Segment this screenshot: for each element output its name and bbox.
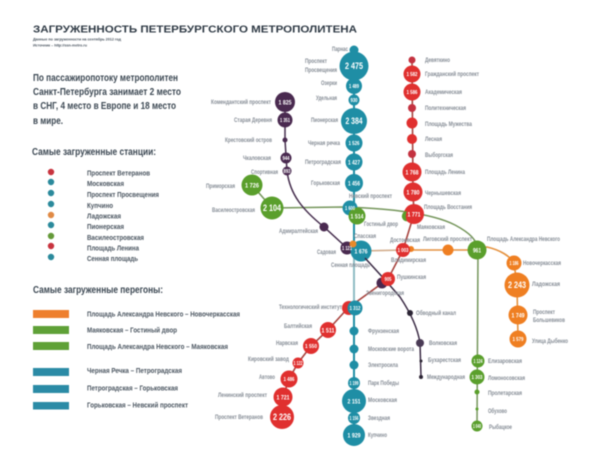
passenger numbers: 2 384 bbox=[346, 116, 362, 126]
station labels: Кировский завод bbox=[248, 355, 289, 363]
station labels: Обухово bbox=[488, 407, 507, 415]
station labels: Гостиный двор bbox=[364, 220, 398, 228]
passenger numbers: 1 156 bbox=[350, 416, 359, 422]
station labels: Политехническая bbox=[425, 105, 466, 112]
station labels: Пушкинская bbox=[397, 274, 426, 281]
legend: busiest stations: Проспект Просвещения bbox=[87, 190, 159, 199]
station labels: Автово bbox=[259, 374, 275, 381]
passenger numbers: 1 726 bbox=[245, 182, 259, 190]
station labels: Звенигородская bbox=[366, 290, 404, 297]
station labels: Комендантский проспект bbox=[211, 98, 271, 106]
passenger numbers: 1 579 bbox=[512, 337, 524, 343]
station labels: Чернышевская bbox=[425, 190, 461, 197]
heading: busiest stations: Самые загруженные станции: bbox=[32, 147, 156, 158]
passenger numbers: 1 514 bbox=[350, 214, 364, 220]
line: red (Kirovsko-Vyborgskaya) bbox=[270, 56, 424, 429]
legend: busiest stations: Пионерская bbox=[87, 222, 124, 231]
passenger numbers: 1 676 bbox=[354, 248, 368, 256]
passenger numbers: 1 768 bbox=[406, 170, 419, 176]
passenger numbers: 1 427 bbox=[348, 160, 360, 166]
passenger numbers: 930 bbox=[350, 98, 358, 104]
legend: busiest stations: Ладожская bbox=[87, 212, 121, 220]
title: ЗАГРУЖЕННОСТЬ ПЕТЕРБУРГСКОГО МЕТРОПОЛИТЕНА bbox=[33, 24, 357, 36]
passenger numbers: 2 151 bbox=[348, 398, 361, 406]
station labels: Международная bbox=[427, 374, 465, 381]
passenger numbers: 1 929 bbox=[348, 432, 361, 440]
transfer: Gostiny Dvor bbox=[348, 208, 366, 224]
station labels: Звездная bbox=[368, 415, 390, 422]
subtitle: data source: Данные по загруженности на сентябрь 2012 год bbox=[33, 38, 122, 42]
legend: busiest segments: Черная Речка – Петроградская bbox=[87, 366, 182, 375]
station labels: Новочеркасская bbox=[523, 260, 561, 267]
station labels: Ленинский проспект bbox=[218, 391, 267, 399]
station labels: Проспект bbox=[305, 58, 327, 65]
passenger numbers: 1 122 bbox=[294, 361, 303, 367]
transfer: Pushkinskaya / Zvenigorodskaya bbox=[365, 258, 424, 379]
legend: busiest stations: Василеостровская bbox=[87, 233, 144, 242]
legend: busiest stations: Московская bbox=[87, 179, 124, 188]
passenger numbers: 1 199 bbox=[350, 381, 359, 387]
station labels: Черная речка bbox=[308, 140, 340, 147]
passenger numbers: 1 526 bbox=[348, 141, 360, 147]
passenger numbers: 1 780 bbox=[406, 190, 420, 196]
intro text block: в мире. bbox=[33, 116, 63, 127]
passenger numbers: 1 721 bbox=[276, 394, 290, 402]
station labels: Площадь Мужества bbox=[425, 121, 472, 128]
station labels: Удельная bbox=[316, 95, 337, 102]
line: blue (Moskovsko-Petrogradskaya) bbox=[340, 46, 368, 446]
station labels: Технологический институт bbox=[279, 303, 342, 311]
passenger numbers: 1 511 bbox=[322, 328, 335, 334]
station labels: Приморская bbox=[206, 183, 235, 190]
station labels: Чкаловская bbox=[243, 155, 271, 162]
intro text block bbox=[33, 73, 181, 127]
station labels: Площадь Ленина bbox=[425, 169, 465, 176]
station labels: Лесная bbox=[425, 136, 442, 143]
passenger numbers: 1 124 bbox=[474, 359, 483, 365]
station labels: Горьковская bbox=[311, 180, 340, 187]
passenger numbers: 2 104 bbox=[263, 203, 281, 213]
passenger numbers: 1 582 bbox=[406, 72, 418, 78]
passenger numbers: 1 186 bbox=[510, 261, 519, 267]
passenger numbers: 2 243 bbox=[508, 280, 526, 290]
passenger numbers: 2 475 bbox=[345, 61, 363, 71]
passenger numbers: 1 312 bbox=[350, 306, 361, 312]
passenger numbers: 1 771 bbox=[408, 212, 421, 218]
station labels: Фрунзенская bbox=[368, 328, 399, 335]
passenger numbers: 1 486 bbox=[284, 377, 295, 383]
legend: busiest segments: Маяковская – Гостиный двор bbox=[87, 326, 177, 334]
passenger numbers bbox=[245, 61, 526, 440]
station labels: Улица Дыбенко bbox=[532, 337, 568, 345]
station labels: Большевиков bbox=[533, 317, 565, 324]
passenger numbers: 1 040 bbox=[473, 424, 481, 430]
station labels: Василеостровская bbox=[212, 207, 255, 214]
station labels: Маяковская bbox=[417, 224, 445, 231]
station labels: Лиговский проспект bbox=[423, 235, 472, 243]
station labels: Выборгская bbox=[425, 151, 453, 159]
passenger numbers: 893 bbox=[284, 169, 291, 175]
passenger numbers: 1 489 bbox=[349, 84, 359, 90]
legend: busiest segments: Площадь Александра Невского – Маяковская bbox=[87, 342, 228, 351]
passenger numbers: 1 303 bbox=[472, 375, 483, 381]
passenger numbers: 1 550 bbox=[305, 344, 317, 350]
subtitle: data source bbox=[33, 38, 122, 48]
passenger numbers: 944 bbox=[282, 156, 290, 162]
station labels: Электросила bbox=[368, 362, 398, 369]
legend: busiest stations: Купчино bbox=[87, 201, 113, 210]
station labels: Ладожская bbox=[532, 281, 560, 288]
passenger numbers: 1 749 bbox=[512, 312, 525, 320]
passenger numbers: 1 003 bbox=[398, 248, 409, 254]
line: green (Nevsko-Vasileostrovskaya) bbox=[242, 174, 486, 432]
station labels: Ломоносовская bbox=[488, 375, 525, 382]
station labels: Сенная площадь bbox=[331, 262, 370, 269]
passenger numbers: 1 586 bbox=[406, 90, 418, 96]
station labels: Московская bbox=[368, 397, 397, 404]
station labels: Озерки bbox=[321, 80, 337, 87]
line: purple (Frunzensko-Primorskaya) bbox=[275, 92, 354, 254]
station labels: Спортивная bbox=[251, 169, 278, 176]
station labels: Старая Деревня bbox=[234, 117, 272, 124]
metro map bbox=[206, 46, 568, 446]
intro text block: Санкт-Петербурга занимает 2 место bbox=[33, 86, 181, 98]
station labels: Просвещения bbox=[305, 67, 337, 74]
station labels bbox=[206, 46, 568, 439]
intro text block: По пассажиропотоку метрополитен bbox=[33, 73, 178, 84]
station labels: Парк Победы bbox=[368, 379, 399, 387]
legend: busiest segments: Петроградская – Горьковская bbox=[87, 384, 178, 392]
station labels: Спасская bbox=[354, 233, 376, 240]
station labels: Крестовский остров bbox=[225, 136, 272, 144]
legend: busiest segments bbox=[33, 310, 240, 410]
transfer: Spasskaya bbox=[350, 240, 356, 248]
station labels: Елизаровская bbox=[488, 358, 522, 365]
intro text block: в СНГ, 4 место в Европе и 18 место bbox=[33, 101, 176, 112]
station labels: Академическая bbox=[425, 89, 462, 96]
station labels: Волковская bbox=[429, 340, 457, 347]
station labels: Бухарестская bbox=[428, 357, 461, 364]
passenger numbers: 1 456 bbox=[348, 180, 360, 188]
subtitle: data source: Источник – http://ssn-metro.ru bbox=[33, 44, 88, 48]
transfer: Mayakovskaya green bbox=[402, 211, 407, 221]
legend: busiest segments: Площадь Александра Невского – Новочеркасская bbox=[87, 310, 240, 318]
station labels: Обводный канал bbox=[416, 309, 456, 317]
station labels: Владимирская bbox=[391, 257, 426, 264]
heading: busiest segments: Самые загруженные перегоны: bbox=[33, 285, 163, 296]
legend: busiest segments: Горьковская – Невский проспект bbox=[87, 400, 188, 410]
station labels: Проспект bbox=[533, 309, 555, 316]
station labels: Балтийская bbox=[284, 322, 312, 330]
station labels: Невский проспект bbox=[349, 192, 392, 200]
passenger numbers: 1 121 bbox=[342, 246, 352, 252]
station labels: Нарвская bbox=[276, 340, 298, 347]
station labels: Проспект Ветеранов bbox=[215, 414, 263, 421]
transfer: Technological Institute bbox=[348, 300, 362, 316]
station labels: Достоевская bbox=[390, 237, 420, 244]
station labels: Гражданский проспект bbox=[425, 70, 479, 78]
station labels: Пролетарская bbox=[488, 390, 522, 397]
line: orange (Pravoberezhnaya) bbox=[361, 244, 530, 348]
passenger numbers: 1 351 bbox=[280, 118, 290, 124]
station labels: Пионерская bbox=[311, 117, 338, 124]
passenger numbers: 905 bbox=[384, 277, 392, 283]
station labels: Площадь Александра Невского bbox=[487, 236, 560, 243]
legend: busiest stations: Проспект Ветеранов bbox=[87, 168, 150, 178]
station labels: Рыбацкое bbox=[489, 423, 512, 431]
station labels: Петроградская bbox=[305, 159, 341, 166]
station labels: Купчино bbox=[368, 432, 387, 439]
passenger numbers: 2 226 bbox=[273, 412, 291, 422]
transfer: Sennaya ploshchad bbox=[350, 240, 372, 262]
station labels: Московские ворота bbox=[368, 346, 414, 353]
passenger numbers: 961 bbox=[473, 248, 481, 254]
legend: busiest stations: Площадь Ленина bbox=[87, 244, 140, 252]
legend: busiest stations: Сенная площадь bbox=[87, 254, 138, 263]
station labels: Девяткино bbox=[425, 57, 450, 64]
station labels: Адмиралтейская bbox=[279, 227, 318, 235]
legend: busiest stations bbox=[48, 168, 159, 263]
station labels: Садовая bbox=[317, 249, 336, 256]
station labels: Площадь Восстания bbox=[424, 204, 472, 211]
passenger numbers: 1 600 bbox=[345, 206, 355, 212]
station labels: Парнас bbox=[332, 46, 348, 53]
passenger numbers: 1 825 bbox=[278, 100, 292, 106]
